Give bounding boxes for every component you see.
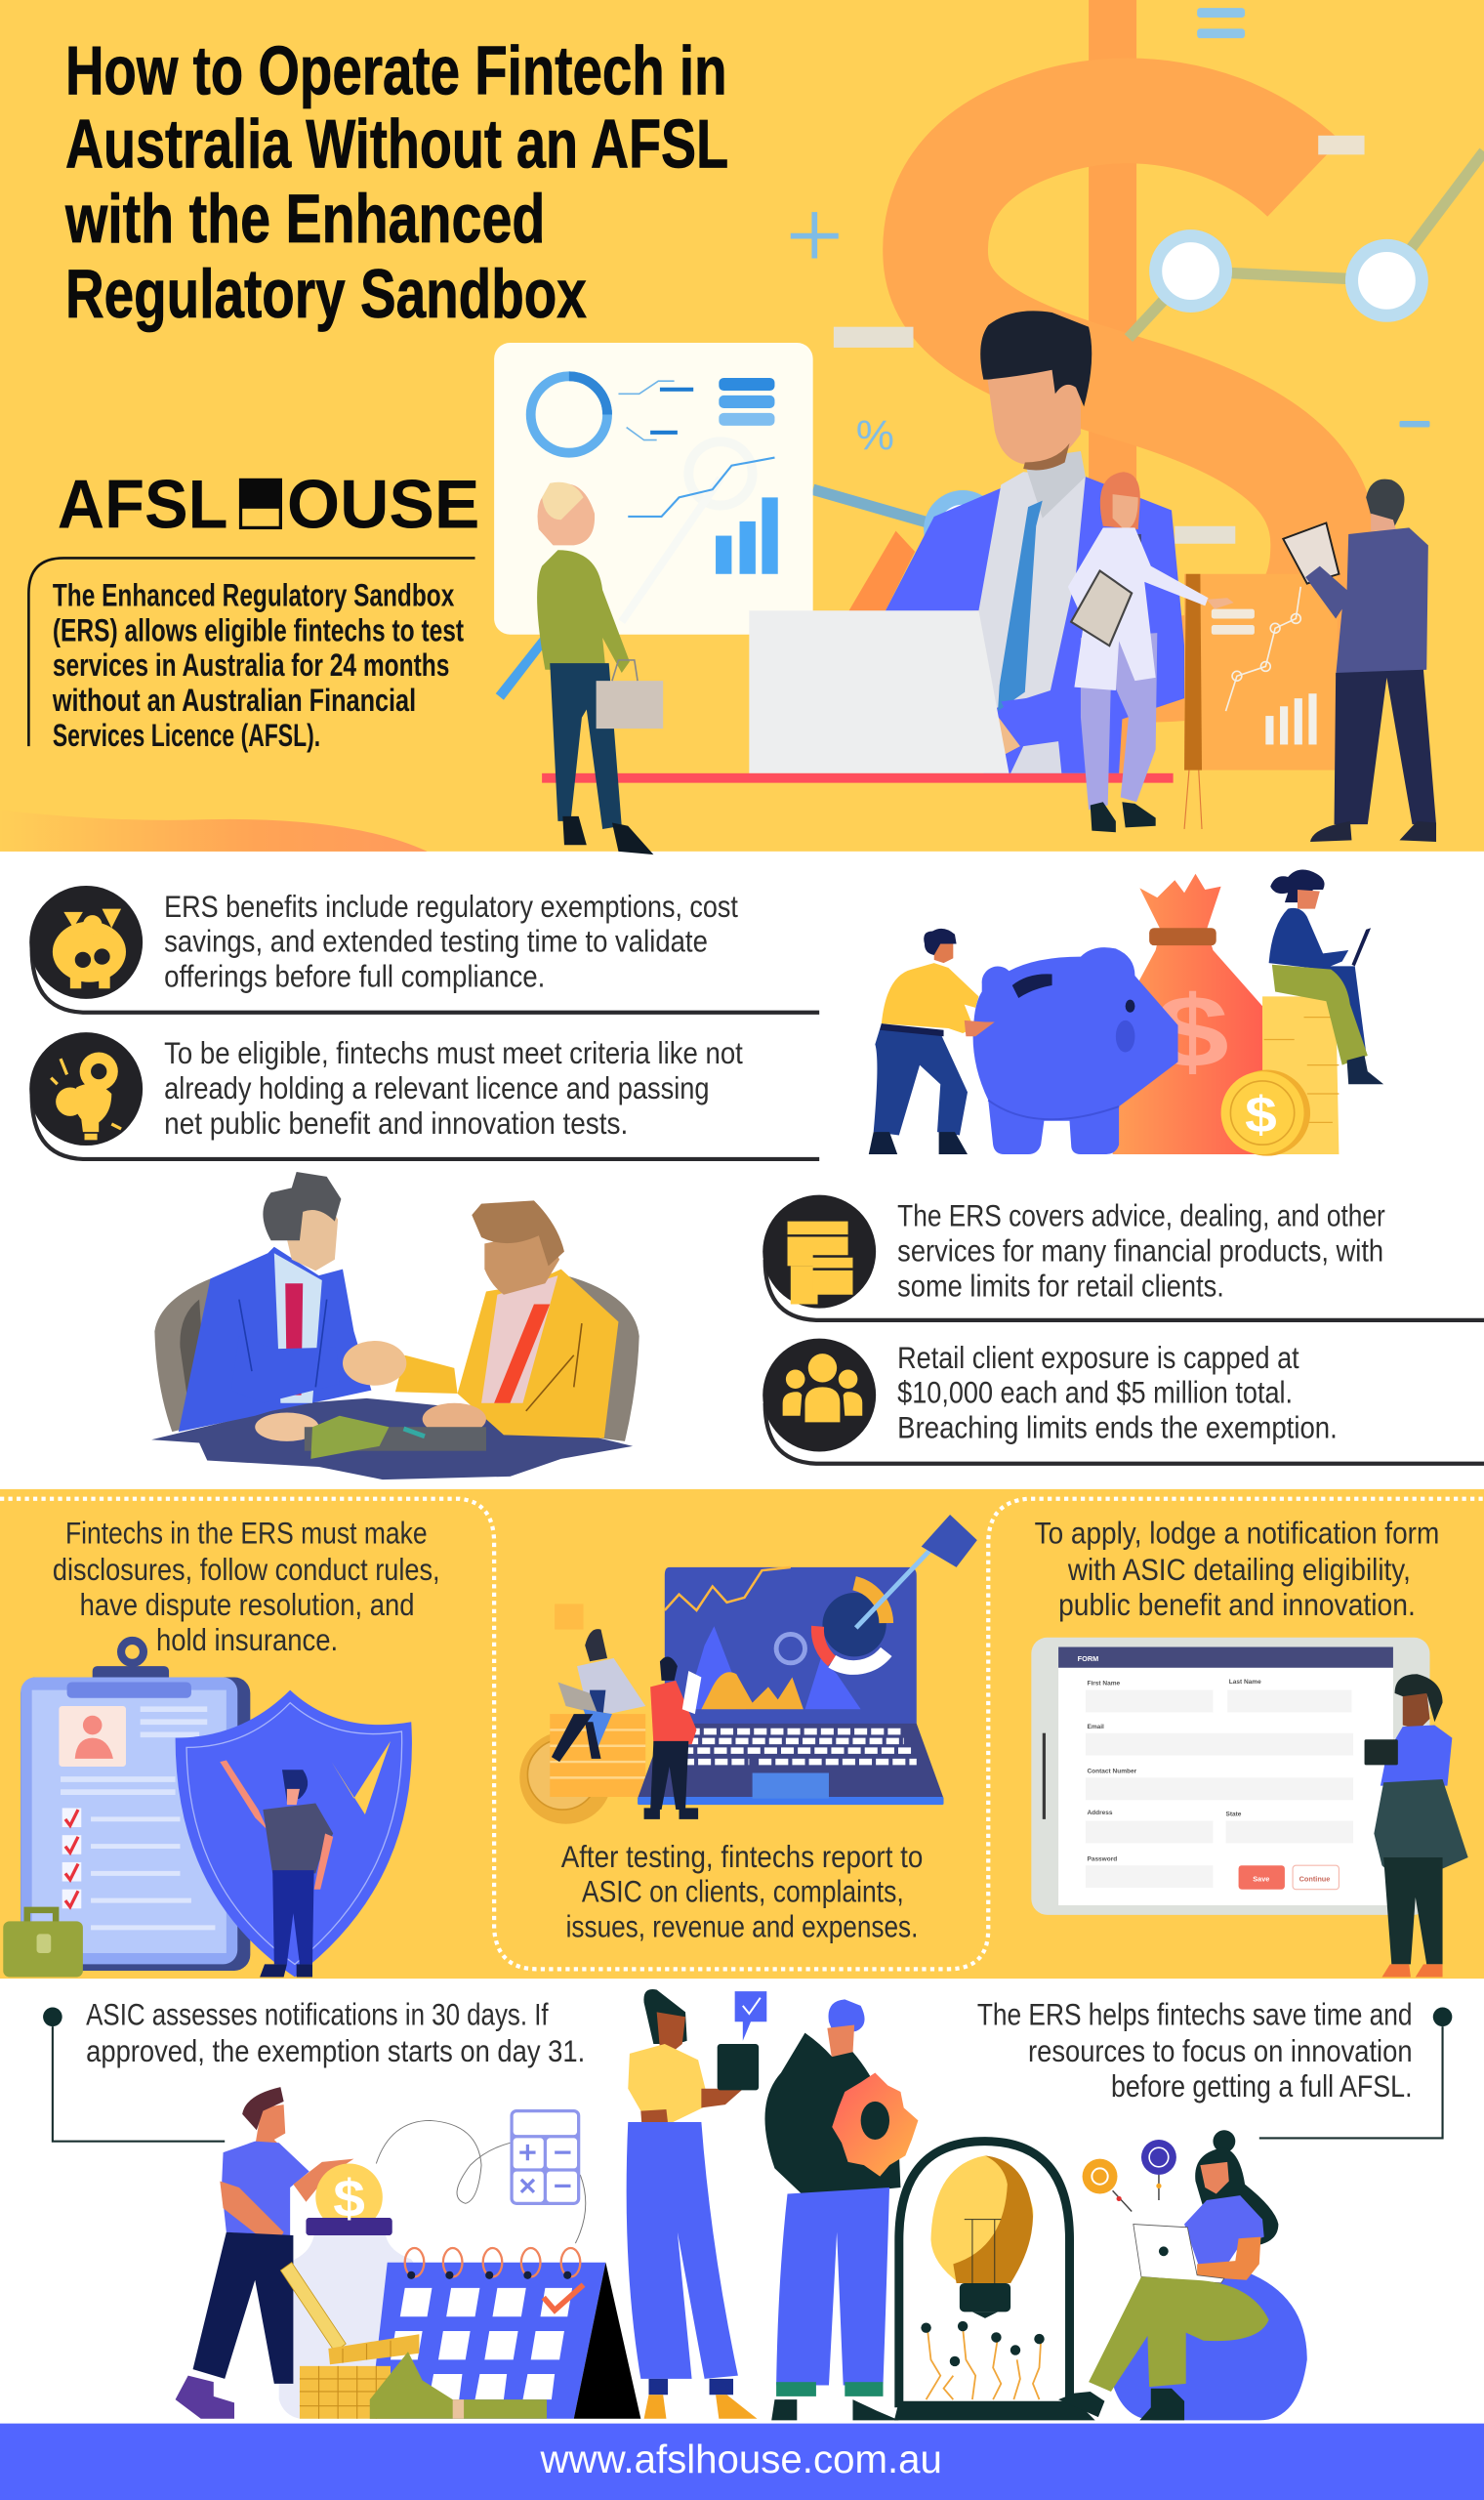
- clasped hands: [343, 1341, 406, 1386]
- illustration: laptop analytics: [519, 1515, 977, 1824]
- illustration: tablet form: Email: [1087, 1724, 1104, 1730]
- icon: piggy bank: [53, 909, 126, 988]
- text: outcome: before getting a full AFSL.: [1111, 2069, 1413, 2104]
- illustration: tablet form: Continue: [1299, 1875, 1330, 1884]
- intro paragraph with bracket: The Enhanced Regulatory Sandbox: [53, 576, 454, 612]
- coin stack: [1262, 996, 1339, 1154]
- title: How to Operate Fintech in: [65, 31, 726, 108]
- text: obligations: [53, 1516, 440, 1657]
- panel: benefits and eligibility: [29, 869, 1383, 1159]
- item: benefits: savings, and extended testing time to validate: [164, 925, 708, 959]
- laptop: [665, 1567, 917, 1726]
- item: eligibility: already holding a relevant licence and passing: [164, 1071, 710, 1105]
- folder and papers: [305, 1427, 486, 1451]
- figure: man right with clipboard: [1283, 479, 1436, 842]
- calendar: [370, 2248, 640, 2419]
- illustration: tablet form: Last Name: [1229, 1679, 1261, 1686]
- briefcase: [27, 1910, 56, 1923]
- panel: coverage and limits: [151, 1172, 1484, 1479]
- red desk bar: [542, 773, 1174, 783]
- illustration: piggy bank and savings: $: [1156, 975, 1229, 1089]
- item: eligibility: net public benefit and innovation tests.: [164, 1106, 628, 1141]
- intro paragraph with bracket: [28, 558, 475, 753]
- network chart lines and nodes: [813, 151, 1484, 562]
- icon: bulb and gears: [51, 1053, 121, 1140]
- illustration: tablet form: FORM: [1078, 1654, 1098, 1663]
- title: Australia Without an AFSL: [65, 104, 728, 182]
- text: obligations: hold insurance.: [156, 1623, 338, 1657]
- item: coverage: The ERS covers advice, dealing, and other: [897, 1199, 1385, 1233]
- text: outcome: resources to focus on innovation: [1028, 2034, 1413, 2068]
- illustration: clipboard, shield and person: [3, 1641, 412, 1977]
- person in red: [660, 1657, 678, 1681]
- item: client limits: Breaching limits ends the exemption.: [897, 1411, 1338, 1445]
- text: reporting: issues, revenue and expenses.: [566, 1910, 918, 1944]
- laptop: [749, 610, 1009, 773]
- illustration: tablet form: Save: [1253, 1875, 1269, 1884]
- figure: woman left: [537, 482, 663, 854]
- icon: people group: [783, 1354, 862, 1422]
- yellow suited man: [395, 1270, 618, 1438]
- blue pointer behind woman: [496, 625, 556, 700]
- figure: woman with tablet: [627, 1989, 766, 2419]
- figure: woman scientist: [1068, 472, 1234, 832]
- footer bar: www.afslhouse.com.au: [539, 2437, 942, 2481]
- seated person: [585, 1629, 607, 1661]
- item: client limits: [763, 1339, 1484, 1464]
- intro paragraph with bracket: (ERS) allows eligible fintechs to test: [53, 611, 464, 647]
- title: Regulatory Sandbox: [65, 255, 587, 332]
- blue suited man: [179, 1247, 371, 1432]
- illustration: piggy bank and savings: [869, 869, 1383, 1156]
- large dollar sign: [848, 0, 1323, 781]
- icon: boxes: [788, 1222, 852, 1305]
- intro paragraph with bracket: Services Licence (AFSL).: [53, 717, 320, 753]
- figure: man with gear: [764, 1999, 918, 2420]
- text: reporting: ASIC on clients, complaints,: [582, 1875, 904, 1909]
- text: application: public benefit and innovation.: [1058, 1588, 1416, 1622]
- item: benefits: [29, 886, 819, 1013]
- text: obligations: have dispute resolution, and: [80, 1588, 414, 1622]
- woman sitting with laptop: [1270, 869, 1325, 902]
- decorative marks: %: [856, 412, 894, 458]
- text: reporting: After testing, fintechs report to: [561, 1840, 923, 1874]
- item: coverage: services for many financial products, with: [897, 1233, 1383, 1268]
- table: [151, 1398, 633, 1479]
- item: client limits: $10,000 each and $5 million total.: [897, 1376, 1293, 1410]
- illustration: tablet form: State: [1226, 1812, 1242, 1818]
- illustration: light bulb under arch: [894, 2142, 1095, 2420]
- item: benefits: ERS benefits include regulatory exemptions, cost: [164, 890, 738, 924]
- item: coverage: [763, 1195, 1484, 1320]
- shield: [176, 1690, 412, 1977]
- figure: woman with phone: [1365, 1674, 1468, 1977]
- illustration: calculator and curves: [376, 2109, 586, 2243]
- text: assessment: approved, the exemption starts on day 31.: [86, 2034, 585, 2068]
- item: benefits: offerings before full compliance.: [164, 960, 545, 994]
- coin: [519, 1731, 612, 1824]
- person pushing: [934, 940, 953, 963]
- logo: AFSL House: AFSL: [58, 465, 227, 542]
- text: outcome: [977, 1997, 1452, 2138]
- bottom-left orange swoosh: [0, 810, 428, 852]
- person: [282, 1770, 308, 1802]
- figure: man with coin: [176, 2087, 392, 2419]
- presentation board: [1184, 574, 1338, 829]
- logo: AFSL House: [58, 465, 479, 542]
- item: eligibility: [29, 1032, 819, 1159]
- intro paragraph with bracket: services in Australia for 24 months: [53, 646, 449, 683]
- item: client limits: Retail client exposure is capped at: [897, 1341, 1299, 1375]
- title: [64, 31, 728, 332]
- panel: hero: [0, 0, 1484, 854]
- item: coverage: some limits for retail clients.: [897, 1269, 1224, 1303]
- ruler, coins and money: [280, 2263, 547, 2419]
- text: application: [1035, 1516, 1439, 1622]
- dashboard card: [494, 343, 813, 635]
- text: application: with ASIC detailing eligibility,: [1067, 1553, 1411, 1587]
- illustration: tablet form: Password: [1087, 1855, 1117, 1862]
- item: eligibility: To be eligible, fintechs must meet criteria like not: [164, 1036, 743, 1070]
- illustration: tablet form: Address: [1087, 1810, 1113, 1816]
- illustration: tablet form: [1031, 1638, 1429, 1915]
- jar with coins and money: [279, 2218, 421, 2419]
- intro paragraph with bracket: without an Australian Financial: [52, 682, 416, 718]
- text: reporting: [561, 1840, 923, 1944]
- panel: assessment and outcome: [43, 1989, 1452, 2420]
- chairs: [154, 1278, 211, 1432]
- illustration: tablet form: Contact Number: [1087, 1769, 1137, 1775]
- text: obligations: Fintechs in the ERS must make: [65, 1516, 428, 1550]
- figure: woman on beanbag: [1058, 2130, 1307, 2420]
- footer bar: [0, 2424, 1484, 2500]
- logo: AFSL House: OUSE: [287, 465, 479, 542]
- illustration: handshake: [151, 1172, 639, 1479]
- money bag: [1113, 874, 1264, 1154]
- illustration: piggy bank and savings: $: [1245, 1087, 1277, 1144]
- text: application: To apply, lodge a notification form: [1035, 1516, 1439, 1550]
- text: assessment: ASIC assesses notifications in 30 days. If: [86, 1997, 549, 2031]
- text: outcome: The ERS helps fintechs save time and: [977, 1997, 1413, 2031]
- title: with the Enhanced: [64, 180, 545, 257]
- illustration: tablet form: First Name: [1087, 1681, 1121, 1688]
- figure: centre man: [885, 311, 1189, 773]
- figure: man with coin: $: [333, 2169, 365, 2228]
- panel: obligations, reporting and application: [0, 1489, 1484, 1979]
- pig: [973, 947, 1178, 1154]
- text: assessment: [43, 1997, 585, 2142]
- text: obligations: disclosures, follow conduct rules,: [53, 1553, 440, 1587]
- decorative marks: [791, 8, 1429, 544]
